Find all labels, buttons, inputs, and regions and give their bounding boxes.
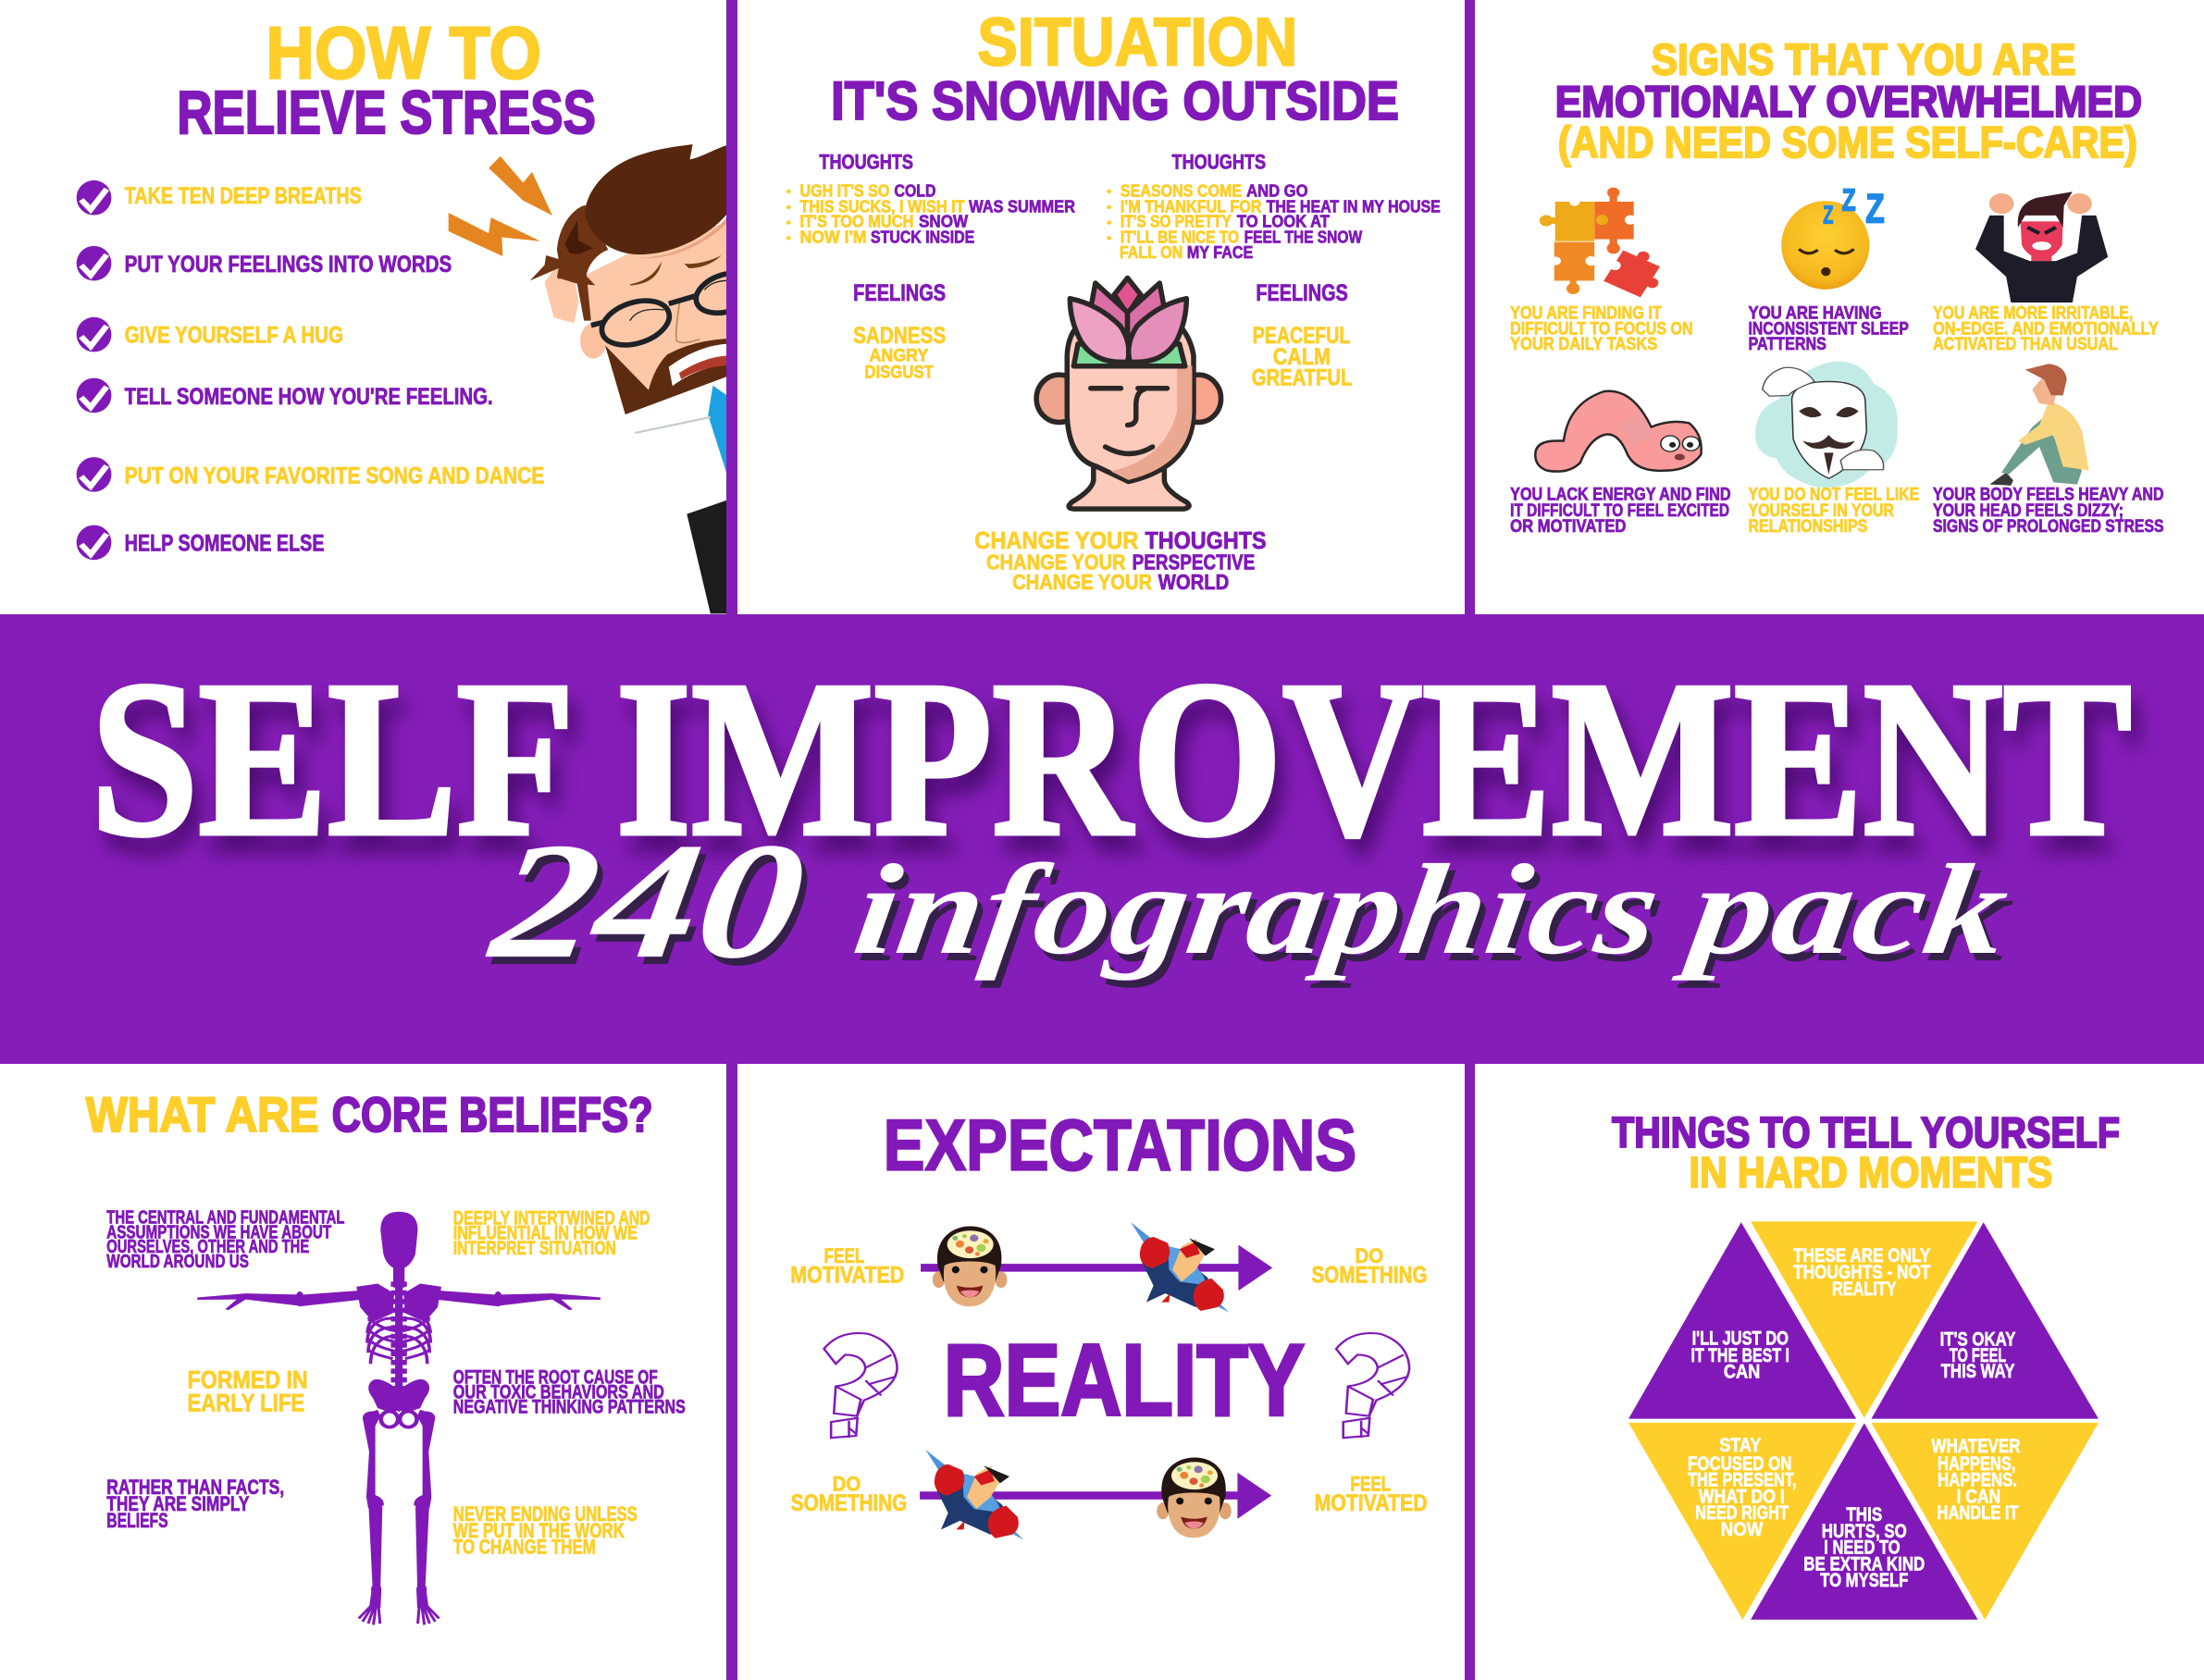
text: root cause: OUR TOXIC BEHAVIORS AND: [453, 1380, 664, 1402]
triangle: stay focused: STAY: [1719, 1434, 1761, 1456]
panel: expectations vs reality: [790, 1105, 1428, 1539]
slogan: change your thoughts: CHANGE YOUR: [1012, 571, 1152, 594]
label: feel motivated reality: MOTIVATED: [1315, 1489, 1428, 1515]
feelings: right: PEACEFUL: [1253, 322, 1350, 348]
thoughts list: left: THIS SUCKS, I WISH IT: [799, 197, 965, 216]
thoughts list: right: THE HEAT IN MY HOUSE: [1267, 197, 1441, 216]
thoughts list: left: COLD: [895, 181, 935, 201]
text: never ending: [453, 1503, 638, 1559]
thoughts list: right: MY FACE: [1187, 243, 1253, 263]
text: deeply intertwined: INTERPRET SITUATION: [453, 1237, 616, 1258]
text: formed in early life: FORMED IN: [188, 1367, 308, 1394]
thoughts list: left: THOUGHTS: [819, 151, 913, 174]
caption row 2: YOURSELF IN YOUR: [1748, 500, 1894, 520]
triangle: best I can: I'LL JUST DO: [1692, 1328, 1789, 1349]
thoughts list: left: SNOW: [919, 212, 969, 231]
label: feel motivated: [790, 1245, 904, 1288]
triangle: this hurts: I NEED TO: [1824, 1536, 1901, 1558]
heading: situation: [831, 5, 1399, 131]
feelings: right: GREATFUL: [1252, 364, 1352, 390]
heading: situation: IT'S SNOWING OUTSIDE: [831, 70, 1399, 131]
triangle: stay focused: [1628, 1423, 1856, 1620]
text: central assumptions: WORLD AROUND US: [106, 1251, 249, 1271]
heading: core beliefs: WHAT ARE: [86, 1088, 318, 1143]
slogan: change your thoughts: [974, 527, 1267, 594]
item 2: PUT YOUR FEELINGS INTO WORDS: [125, 251, 452, 278]
text: central assumptions: OURSELVES, OTHER AND THE: [106, 1236, 309, 1257]
caption row 1: ACTIVATED THAN USUAL: [1933, 333, 2118, 354]
thoughts list: left: STUCK INSIDE: [871, 228, 974, 247]
label: do something reality: DO: [833, 1473, 861, 1496]
text: formed in early life: EARLY LIFE: [188, 1390, 304, 1417]
feelings: right: FEELINGS: [1256, 279, 1348, 305]
caption row 2: RELATIONSHIPS: [1748, 515, 1867, 536]
triangle: only thoughts: THOUGHTS - NOT: [1793, 1261, 1931, 1282]
panel: what are core beliefs: [86, 1088, 686, 1624]
text: formed in early life: [188, 1367, 308, 1417]
caption row 1: DIFFICULT TO FOCUS ON: [1510, 317, 1693, 339]
label: feel motivated reality: [1315, 1473, 1428, 1515]
panel: how to relieve stress: [77, 12, 727, 613]
text: deeply intertwined: INFLUENTIAL IN HOW WE: [453, 1222, 638, 1243]
triangle: best I can: IT THE BEST I: [1691, 1344, 1789, 1366]
caption row 1: YOU ARE HAVING: [1748, 302, 1882, 323]
thoughts list: right: THOUGHTS: [1172, 151, 1266, 174]
subtitle: 240 infographics pack: pack: [1670, 839, 2016, 982]
triangle: this hurts: BE EXTRA KIND: [1803, 1552, 1925, 1575]
illustration: stressed man: [529, 144, 726, 414]
text: never ending: NEVER ENDING UNLESS: [453, 1503, 638, 1526]
thoughts list: right: IT'LL BE NICE TO: [1121, 228, 1239, 247]
thoughts list: left: NOW I'M: [799, 228, 866, 247]
heading: core beliefs: CORE BELIEFS?: [332, 1088, 653, 1143]
thoughts list: right: [1107, 151, 1441, 263]
feelings: right: [1252, 279, 1352, 390]
triangle: stay focused: WHAT DO I: [1699, 1486, 1785, 1507]
arrow: reality: [920, 1473, 1271, 1519]
text: never ending: TO CHANGE THEM: [453, 1536, 596, 1559]
icon: sleeping emoji: Z: [1865, 186, 1885, 232]
heading: how to relieve stress: [177, 12, 596, 147]
item 6: HELP SOMEONE ELSE: [125, 530, 325, 556]
icon: head with lotus: [1036, 278, 1221, 509]
text: never ending: WE PUT IN THE WORK: [453, 1520, 625, 1542]
label: do something: SOMETHING: [1312, 1262, 1428, 1288]
text: root cause: OFTEN THE ROOT CAUSE OF: [453, 1366, 658, 1388]
icon: lightning bolts: [449, 156, 552, 256]
triangle: this hurts: THIS: [1846, 1503, 1882, 1525]
triangle: okay to feel: [1871, 1222, 2099, 1419]
triangle: stay focused: NEED RIGHT: [1695, 1501, 1789, 1524]
label: do something: DO: [1355, 1245, 1383, 1268]
caption row 2: YOU DO NOT FEEL LIKE: [1748, 484, 1919, 504]
icon: check 5: [77, 457, 111, 492]
text: rather than facts: [106, 1476, 284, 1533]
triangle: only thoughts: [1751, 1221, 1978, 1418]
slogan: change your thoughts: PERSPECTIVE: [1133, 550, 1255, 574]
label: do something reality: SOMETHING: [791, 1489, 907, 1515]
feelings: left: ANGRY: [869, 344, 929, 365]
text: deeply intertwined: [453, 1206, 650, 1258]
item 3: GIVE YOURSELF A HUG: [125, 322, 343, 348]
text: root cause: NEGATIVE THINKING PATTERNS: [453, 1396, 686, 1417]
thoughts list: right: AND GO: [1246, 181, 1307, 201]
icon: check 1: [77, 180, 111, 216]
caption row 1: [1510, 302, 2159, 354]
text: rather than facts: RATHER THAN FACTS,: [106, 1476, 284, 1499]
subtitle: 240 infographics pack: [479, 809, 2016, 994]
text: root cause: [453, 1366, 686, 1417]
icon: question mark left: [824, 1333, 898, 1438]
feelings: right: CALM: [1273, 343, 1331, 370]
label: feel motivated: FEEL: [824, 1245, 864, 1268]
caption row 2: [1510, 484, 2164, 536]
slogan: change your thoughts: WORLD: [1158, 571, 1229, 594]
illustration: skeleton: [197, 1212, 601, 1624]
icon: tired worm: [1535, 391, 1702, 472]
icon: happy head reality: [1157, 1458, 1232, 1538]
panel: things to tell yourself: [1612, 1107, 2120, 1620]
thoughts list: left: WAS SUMMER: [969, 197, 1075, 216]
heading: how to relieve stress: RELIEVE STRESS: [177, 80, 596, 147]
triangle: this hurts: [1751, 1423, 1978, 1620]
label: do something reality: [791, 1473, 907, 1515]
heading: core beliefs: [86, 1088, 653, 1143]
label: do something: [1312, 1245, 1428, 1288]
icon: puzzle: [1540, 188, 1672, 301]
thoughts list: left: [786, 151, 1075, 247]
triangle: stay focused: NOW: [1721, 1518, 1764, 1540]
label: feel motivated reality: FEEL: [1350, 1473, 1391, 1496]
triangle: okay to feel: THIS WAY: [1941, 1360, 2015, 1382]
label: feel motivated: MOTIVATED: [790, 1262, 904, 1288]
caption row 1: PATTERNS: [1748, 333, 1826, 354]
heading: expectations: EXPECTATIONS: [884, 1105, 1356, 1186]
triangle: this hurts: HURTS, SO: [1822, 1520, 1907, 1541]
triangle: whatever happens: HANDLE IT: [1938, 1501, 2019, 1524]
icon: superhero reality: [925, 1450, 1023, 1539]
triangle: only thoughts: THESE ARE ONLY: [1793, 1244, 1931, 1266]
triangle: whatever happens: [1871, 1423, 2099, 1620]
thoughts list: left: UGH IT'S SO: [799, 181, 889, 201]
icon: check 2: [77, 246, 111, 280]
text: central assumptions: [106, 1206, 345, 1271]
triangle: okay to feel: TO FEEL: [1950, 1344, 2006, 1366]
triangle: whatever happens: HAPPENS,: [1938, 1452, 2015, 1474]
triangle: whatever happens: I CAN: [1957, 1486, 2000, 1507]
icon: sitting person: [1989, 364, 2089, 486]
heading: signs: SIGNS THAT YOU ARE: [1652, 35, 2075, 83]
triangle: only thoughts: REALITY: [1832, 1278, 1897, 1299]
icon: superhero: [1131, 1222, 1229, 1313]
item 1: TAKE TEN DEEP BREATHS: [125, 182, 362, 209]
illustration: tie, collar and jacket: [635, 386, 727, 613]
caption row 1: YOU ARE FINDING IT: [1510, 302, 1662, 323]
triangle: okay to feel: IT'S OKAY: [1940, 1328, 2016, 1350]
triangle: this hurts: TO MYSELF: [1820, 1569, 1908, 1590]
heading: signs: [1555, 35, 2142, 167]
thoughts list: right: SEASONS COME: [1121, 181, 1242, 201]
feelings: left: FEELINGS: [853, 279, 946, 305]
text: rather than facts: THEY ARE SIMPLY: [106, 1493, 249, 1515]
icon: sleeping emoji: Z: [1823, 202, 1834, 229]
thoughts list: right: I'M THANKFUL FOR: [1121, 197, 1262, 216]
triangle: whatever happens: HAPPENS.: [1938, 1468, 2017, 1490]
heading: reality: REALITY: [944, 1323, 1305, 1437]
panel dividers: [726, 0, 1475, 1680]
caption row 2: YOU LACK ENERGY AND FIND: [1510, 484, 1731, 504]
panel: signs of emotional overwhelm: [1510, 35, 2164, 536]
banner: [0, 614, 2204, 1064]
icon: mask with clouds: [1755, 362, 1898, 488]
triangle: best I can: [1628, 1222, 1856, 1419]
panel: situation: [786, 5, 1441, 594]
item 5: PUT ON YOUR FAVORITE SONG AND DANCE: [125, 463, 544, 488]
triangle: stay focused: FOCUSED ON: [1688, 1452, 1792, 1474]
feelings: left: DISGUST: [864, 361, 934, 382]
icon: sleeping emoji: [1781, 182, 1885, 290]
text: central assumptions: THE CENTRAL AND FUNDAMENTAL: [106, 1206, 345, 1228]
icon: check 4: [77, 378, 111, 413]
subtitle: 240 infographics pack: 240: [479, 809, 814, 994]
thoughts list: right: FEEL THE SNOW: [1244, 228, 1362, 247]
item 4: TELL SOMEONE HOW YOU'RE FEELING.: [125, 383, 493, 409]
icon: sleeping emoji: Z: [1842, 182, 1856, 217]
caption row 1: YOUR DAILY TASKS: [1510, 333, 1657, 354]
icon: happy head: [933, 1227, 1007, 1306]
caption row 2: OR MOTIVATED: [1510, 515, 1626, 536]
caption row 2: IT DIFFICULT TO FEEL EXCITED: [1510, 500, 1729, 520]
slogan: change your thoughts: CHANGE YOUR: [986, 550, 1126, 574]
icon: check 6: [77, 525, 111, 560]
triangle: best I can: CAN: [1724, 1361, 1760, 1382]
thoughts list: right: FALL ON: [1120, 243, 1182, 263]
triangle: whatever happens: WHATEVER: [1931, 1435, 2021, 1457]
thoughts list: right: TO LOOK AT: [1237, 212, 1330, 231]
text: deeply intertwined: DEEPLY INTERTWINED AND: [453, 1206, 650, 1229]
heading: how to relieve stress: HOW TO: [266, 12, 541, 94]
slogan: change your thoughts: CHANGE YOUR: [974, 527, 1139, 554]
slogan: change your thoughts: THOUGHTS: [1145, 527, 1267, 554]
text: rather than facts: BELIEFS: [106, 1510, 168, 1533]
icon: question mark right: [1336, 1333, 1409, 1438]
heading: situation: SITUATION: [977, 5, 1297, 80]
checklist: [77, 180, 544, 560]
caption row 1: INCONSISTENT SLEEP: [1748, 317, 1909, 339]
subtitle: 240 infographics pack: infographics: [847, 839, 1667, 982]
text: central assumptions: ASSUMPTIONS WE HAVE ABOUT: [106, 1221, 331, 1242]
icon: check 3: [77, 317, 111, 352]
arrow: expectations: [921, 1245, 1272, 1291]
heading: things to tell yourself: IN HARD MOMENTS: [1690, 1147, 2052, 1196]
thoughts list: left: IT'S TOO MUCH: [799, 212, 913, 231]
feelings: left: SADNESS: [853, 322, 946, 348]
heading: things to tell yourself: [1612, 1107, 2120, 1196]
thoughts list: right: IT'S SO PRETTY: [1121, 212, 1232, 231]
triangle: stay focused: THE PRESENT,: [1688, 1469, 1797, 1490]
icon: angry man: [1975, 191, 2108, 303]
feelings: left: [853, 279, 946, 382]
